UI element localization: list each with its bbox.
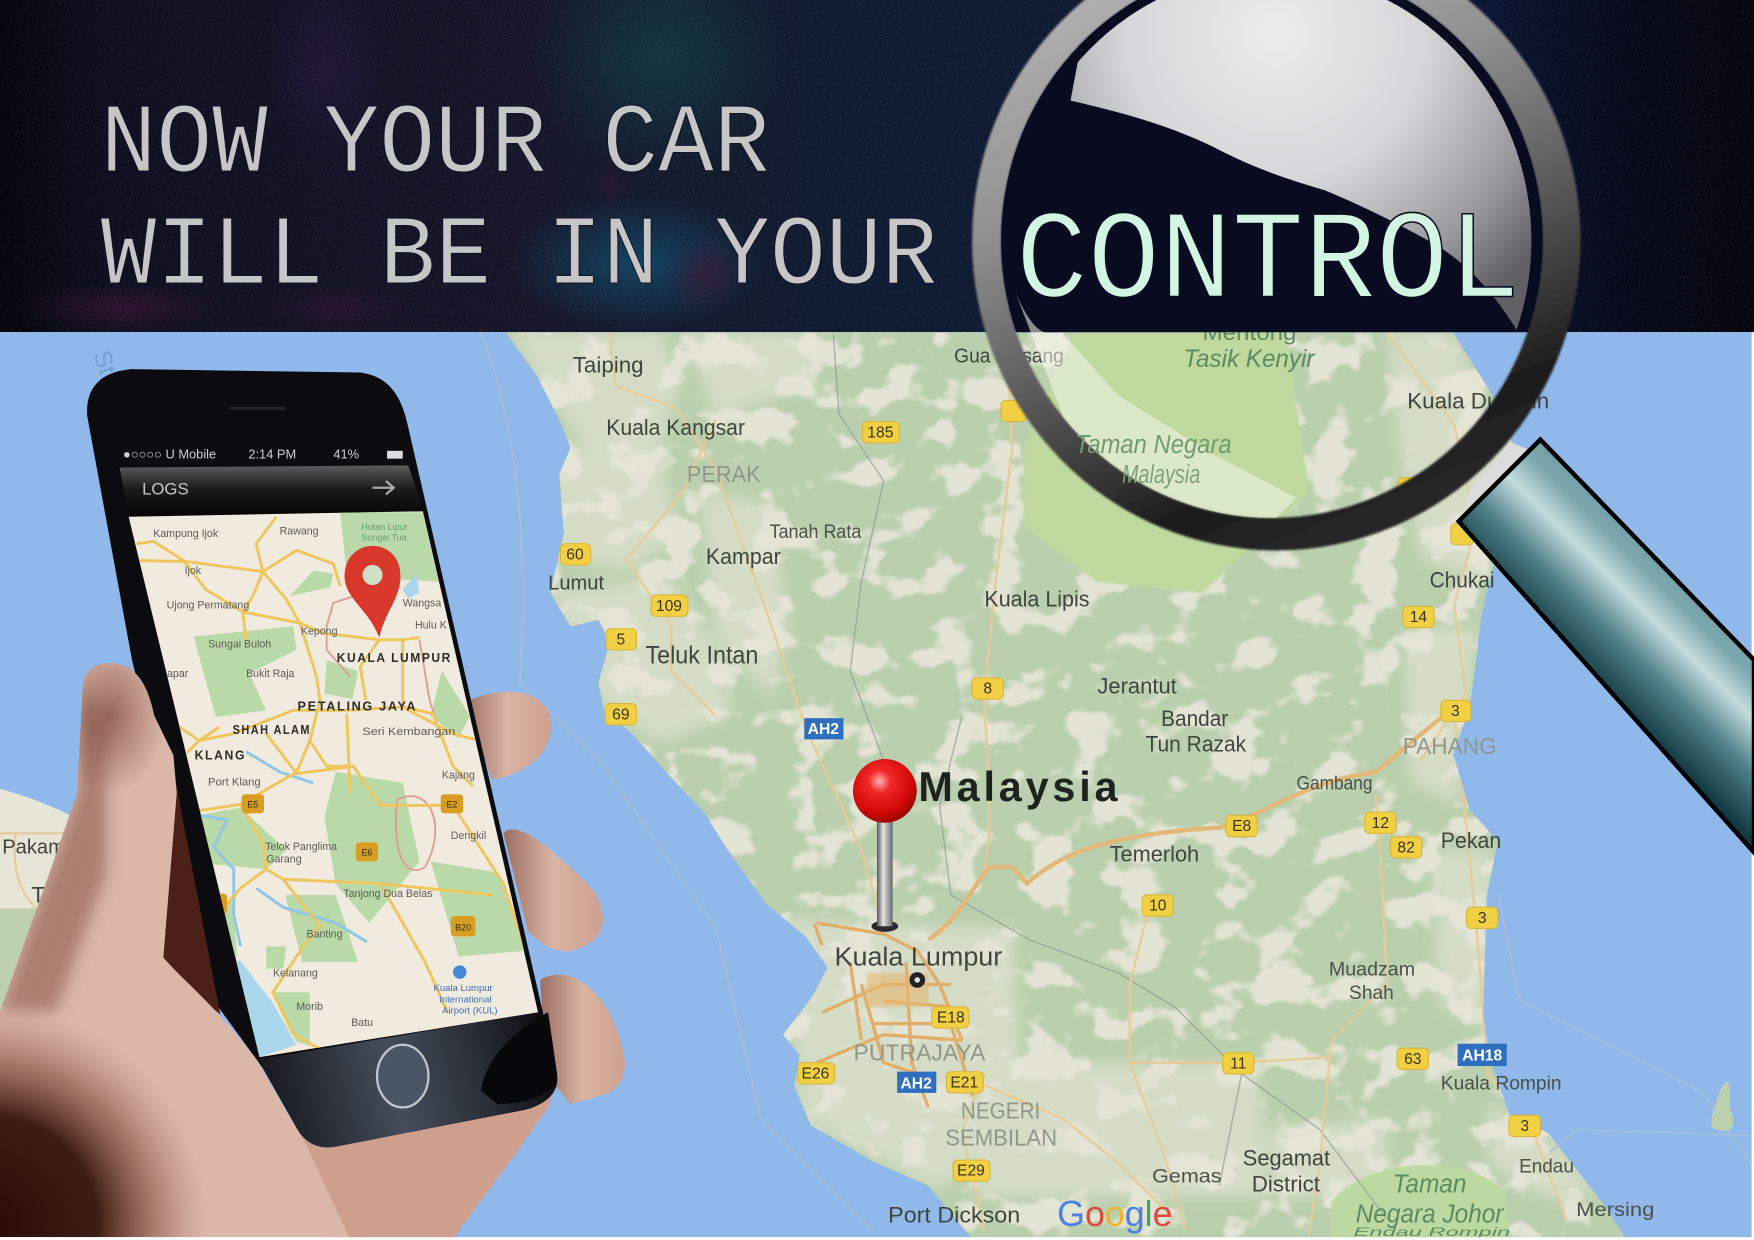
phone screen map: Kampung Ijok <box>153 528 219 540</box>
road shields: 3 <box>1451 703 1460 720</box>
phone screen map: Rawang <box>280 526 319 538</box>
phone screen map: Airport (KUL) <box>442 1005 498 1016</box>
heading: title: NOW YOUR CAR <box>101 89 770 201</box>
phone body <box>87 369 557 1147</box>
phone screen map: E26 <box>207 899 223 909</box>
map place labels: Jerantut <box>1097 674 1178 699</box>
phone screen map: E5 <box>247 800 258 810</box>
map place labels: PUTRAJAYA <box>854 1039 986 1065</box>
phone lower bezel <box>260 1012 557 1147</box>
map place labels: Mentong <box>1203 320 1296 345</box>
road shields: E26 <box>802 1065 830 1082</box>
map place labels: Gua Musang <box>954 345 1064 367</box>
map place labels: Kampar <box>706 544 781 569</box>
map place labels: Taiping <box>573 353 644 378</box>
urban area: Kuala Lumpur <box>814 923 973 1107</box>
heading: title: WILL BE IN YOUR <box>101 201 937 313</box>
thumb shadow on bezel <box>481 1012 557 1104</box>
road shields: 14 <box>1410 609 1427 626</box>
road shields: 63 <box>1404 1051 1422 1068</box>
road shields: AH2 <box>900 1075 932 1092</box>
island <box>1711 1082 1733 1131</box>
phone screen map: B20 <box>455 923 471 933</box>
heading: CONTROL: CONTROL <box>1016 192 1520 334</box>
status bar: 2:14 PM <box>248 447 296 462</box>
road shields: 12 <box>1372 815 1389 832</box>
map place labels: Shah <box>1349 983 1394 1004</box>
map place labels: Bandar <box>1161 706 1229 731</box>
phone screen map: Bukit Raja <box>246 668 295 680</box>
map place labels <box>548 320 1654 1239</box>
map place labels: Muadzam <box>1329 959 1415 980</box>
road shields: 60 <box>566 546 584 563</box>
map place labels: Kuala Rompin <box>1441 1074 1562 1095</box>
earpiece <box>229 407 285 410</box>
phone screen map: International <box>439 994 491 1005</box>
status bar <box>124 449 403 459</box>
map place labels: Taman <box>1393 1170 1467 1198</box>
fingertip shading <box>78 663 159 785</box>
phone screen map: Hulu K <box>415 620 447 632</box>
place labels seen through the lens: Taman Negara <box>1075 431 1232 459</box>
sea <box>0 332 1752 1237</box>
map place labels: Kuala Dungun <box>1407 388 1549 413</box>
road shields: 5 <box>616 631 625 648</box>
map place labels: NEGERI <box>961 1098 1040 1124</box>
map place labels: District <box>1252 1171 1321 1196</box>
phone screen map: Morib <box>296 1001 323 1013</box>
map place labels: Tun Razak <box>1145 732 1247 757</box>
lens glass <box>984 0 1566 526</box>
phone screen map: Ujong Permatang <box>167 600 249 612</box>
phone screen map: Dengkil <box>451 830 486 842</box>
phone screen map: Wangsa <box>403 597 441 609</box>
phone screen map: Sungai Buloh <box>208 639 271 651</box>
road shields: 10 <box>1149 898 1167 915</box>
banner background <box>0 0 1754 332</box>
road shields: E21 <box>950 1074 978 1091</box>
map place labels: Kuala Lumpur <box>834 943 1003 971</box>
hand: back fingers and palm behind phone <box>285 692 625 1237</box>
phone screen map: Kuala Lumpur <box>434 983 493 994</box>
icon: Kuala Lumpur marker dot <box>909 972 925 988</box>
land: Sumatra fragment <box>0 789 70 1012</box>
phone screen map: KLANG <box>195 748 246 763</box>
status bar: ●○○○○ U Mobile <box>123 447 216 462</box>
icon: red map pin <box>853 759 917 932</box>
phone screen map: Batu <box>351 1017 373 1029</box>
phone screen map: Tanjong Dua Belas <box>343 888 432 900</box>
phone screen map: Banting <box>307 928 343 940</box>
label: Malaysia: Malaysia <box>918 764 1121 810</box>
phone screen map: Port Klang <box>208 776 261 788</box>
phone screen map: Kapar <box>160 668 189 680</box>
road shields: 3 <box>1520 1118 1529 1135</box>
road shields: AH2 <box>808 721 839 738</box>
rivers and state borders <box>833 336 1387 1219</box>
roads <box>610 332 1566 1235</box>
faint strait label: Str <box>88 347 123 386</box>
lens rim <box>972 0 1581 551</box>
top glare <box>1071 0 1566 336</box>
road shields: 3 <box>1478 910 1487 927</box>
map place labels: Lumut <box>548 573 604 595</box>
road shields: 11 <box>1230 1055 1246 1072</box>
place labels seen through the lens <box>1075 431 1232 489</box>
road shields: 82 <box>1397 839 1415 856</box>
map place labels: Gambang <box>1296 774 1373 795</box>
map place labels: PAHANG <box>1403 733 1497 759</box>
lower glare <box>1016 293 1296 526</box>
place labels seen through the lens: Malaysia <box>1122 461 1200 489</box>
map place labels: Temerloh <box>1110 841 1199 866</box>
map place labels: Teluk Intan <box>645 642 758 669</box>
finger left-side shading <box>0 685 106 1011</box>
phone screen map: KUALA LUMPUR <box>337 650 452 665</box>
panel: title banner <box>0 0 1754 332</box>
logs title: LOGS <box>142 479 189 498</box>
phone screen map: Ijok <box>185 565 202 577</box>
hand: index finger and palm over phone <box>0 638 358 1237</box>
road shields: 185 <box>867 424 894 441</box>
map place labels: Chukai <box>1430 567 1494 592</box>
national parks <box>1024 332 1309 593</box>
maritime boundary lines <box>481 332 1752 1230</box>
road shields: E8 <box>1232 818 1252 835</box>
map place labels: Tasik Kenyir <box>1184 346 1316 373</box>
map place labels: Gemas <box>1152 1166 1222 1187</box>
phone screen map: Kelanang <box>273 968 318 980</box>
map place labels: Mersing <box>1576 1200 1654 1221</box>
phone screen map: Sungai Tua <box>361 532 407 542</box>
shadow between finger and phone <box>163 783 220 1015</box>
painted texture <box>17 0 789 332</box>
phone screen map: PETALING JAYA <box>298 698 417 713</box>
handle neck <box>1465 442 1549 537</box>
map place labels: Negara Johor <box>1356 1201 1505 1229</box>
land: peninsular Malaysia <box>492 332 1644 1237</box>
land: Sumatra fragment: T <box>31 883 45 908</box>
icon: magnifying glass <box>972 0 1754 852</box>
panel: map background <box>0 320 1752 1239</box>
phone screen map: SHAH ALAM <box>233 722 311 737</box>
phone <box>87 369 559 1147</box>
icon: red location marker on screen <box>345 546 400 638</box>
home button <box>377 1045 428 1107</box>
map place labels: PERAK <box>687 461 761 487</box>
map place labels: Pekan <box>1441 828 1501 853</box>
map place labels: Endau Rompin <box>1354 1225 1510 1239</box>
google logo: Google <box>1057 1194 1173 1234</box>
map place labels: Port Dickson <box>888 1203 1020 1228</box>
heading: title <box>101 89 937 313</box>
road shields: E29 <box>957 1163 985 1180</box>
phone screen map: Telok Panglima <box>265 841 337 853</box>
phone screen map: Kajang <box>442 770 475 782</box>
map place labels: Endau <box>1519 1156 1574 1177</box>
app bar <box>120 465 424 517</box>
dark lower-left shadow of wrist <box>0 1018 196 1238</box>
handle <box>1459 440 1754 852</box>
phone screen map: Hutan Lipur <box>361 522 408 532</box>
icon: arrow <box>373 481 394 494</box>
map place labels: Kuala Lipis <box>984 586 1090 611</box>
phone screen map: E6 <box>361 848 372 858</box>
phone screen map: Kepong <box>301 625 338 637</box>
land: Sumatra fragment: Pakam <box>2 837 65 859</box>
phone screen map: E2 <box>446 800 457 810</box>
phone screen map: Seri Kembangan <box>362 726 455 738</box>
road shields <box>560 400 1540 1181</box>
phone screen map <box>128 511 538 1058</box>
phone screen map: Garang <box>266 853 302 865</box>
map place labels: Segamat <box>1243 1146 1331 1171</box>
road shields: AH18 <box>1462 1047 1502 1064</box>
road shields: 8 <box>983 681 992 698</box>
map place labels: Kuala Kangsar <box>606 415 746 440</box>
road shields: E18 <box>937 1009 965 1026</box>
map place labels: SEMBILAN <box>945 1124 1057 1150</box>
road shields: 109 <box>656 598 682 615</box>
road shields: 69 <box>612 706 630 723</box>
map place labels: Tanah Rata <box>770 522 862 543</box>
grain <box>0 0 1754 332</box>
status bar: 41% <box>333 447 359 462</box>
